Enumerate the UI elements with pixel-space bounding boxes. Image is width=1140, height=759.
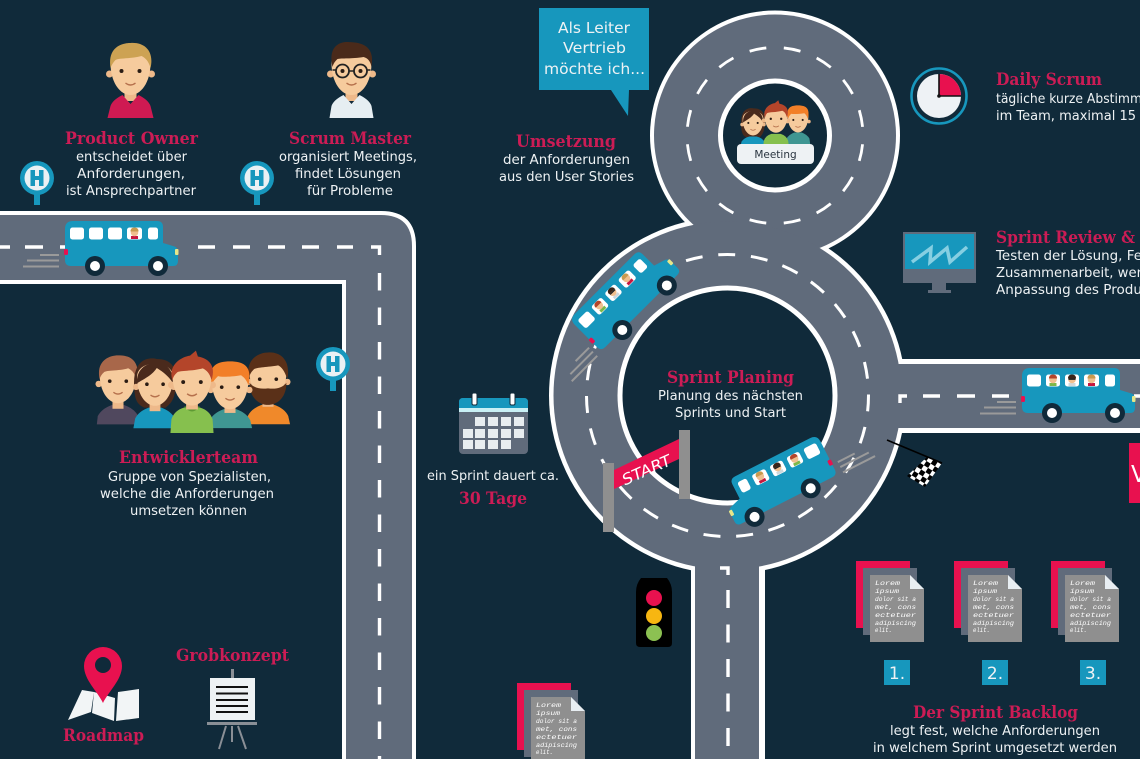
icon: document stack 2: Lorem bbox=[973, 580, 998, 587]
callout: speech bubble bbox=[539, 8, 649, 116]
icon: document stack roadmap: adipiscing bbox=[536, 742, 577, 749]
icon: bus stop 1 bbox=[20, 161, 54, 205]
heading: daily scrum: Daily Scrum bbox=[996, 70, 1103, 89]
icon: document stack 3: elit. bbox=[1070, 627, 1087, 634]
icon: document stack 1: dolor sit a bbox=[875, 596, 916, 603]
icon: document stack 1 bbox=[856, 561, 924, 642]
icon: bus stop 3 bbox=[316, 347, 350, 391]
callout: speech bubble: Vertrieb bbox=[563, 39, 626, 57]
icon: document stack roadmap: ectetuer bbox=[536, 734, 577, 741]
icon: checkered flag bbox=[887, 440, 942, 487]
number box 3: 3. bbox=[1085, 664, 1101, 684]
callout: speech bubble: Als Leiter bbox=[558, 19, 631, 37]
bus: right road bbox=[980, 368, 1136, 423]
text: entwicklerteam description: welche die Anforderungen bbox=[100, 486, 274, 502]
text: scrum master description: findet Lösungen bbox=[295, 166, 401, 182]
heading: umsetzung: Umsetzung bbox=[516, 132, 616, 151]
icon: product owner bbox=[106, 43, 155, 118]
icon: document stack 2: ectetuer bbox=[973, 612, 1014, 619]
icon: bus stop 2 bbox=[240, 161, 274, 205]
icon: document stack 2: dolor sit a bbox=[973, 596, 1014, 603]
icon: document stack 1: ectetuer bbox=[875, 612, 916, 619]
text: umsetzung description: der Anforderungen bbox=[503, 152, 630, 168]
bus: upper left of sprint ring bbox=[540, 239, 688, 388]
heading: 30 tage: 30 Tage bbox=[459, 489, 527, 508]
icon: document stack 2: adipiscing bbox=[973, 620, 1014, 627]
icon: document stack 3: met, cons bbox=[1070, 604, 1111, 611]
icon: document stack roadmap: elit. bbox=[536, 749, 553, 756]
icon: document stack 2: met, cons bbox=[973, 604, 1014, 611]
icon: presentation board bbox=[207, 669, 257, 749]
icon: roadmap bbox=[68, 647, 139, 721]
text: sprint planing description bbox=[658, 388, 803, 421]
number box 2: 2. bbox=[987, 664, 1003, 684]
number box 3 bbox=[1080, 660, 1106, 685]
text: entwicklerteam description: umsetzen können bbox=[130, 503, 247, 519]
icon: meeting group bbox=[737, 100, 814, 164]
icon: document stack 3: Lorem bbox=[1070, 580, 1095, 587]
icon: scrum master bbox=[327, 42, 376, 118]
text: sprint review description: Anpassung des Produ bbox=[996, 282, 1140, 298]
icon: document stack 1: met, cons bbox=[875, 604, 916, 611]
text: scrum master description: für Probleme bbox=[307, 183, 393, 199]
number box 2 bbox=[982, 660, 1008, 685]
callout: speech bubble: möchte ich... bbox=[544, 60, 645, 78]
text: sprint planing description: Planung des nächsten bbox=[658, 388, 803, 404]
bus: left road bbox=[23, 221, 178, 276]
heading: roadmap: Roadmap bbox=[63, 726, 144, 745]
text: umsetzung description bbox=[499, 152, 634, 185]
text: sprint review description bbox=[995, 248, 1140, 298]
text: product owner description: entscheidet über bbox=[76, 149, 187, 165]
icon: document stack 2: ipsum bbox=[973, 588, 997, 595]
text: daily scrum description: im Team, maximal 15 bbox=[996, 108, 1136, 124]
icon: document stack roadmap: ipsum bbox=[536, 710, 560, 717]
icon: document stack roadmap bbox=[517, 683, 585, 759]
icon: calendar bbox=[459, 393, 528, 454]
icon: document stack 2 bbox=[954, 561, 1022, 642]
heading: entwicklerteam: Entwicklerteam bbox=[119, 448, 259, 467]
start gate: START bbox=[621, 451, 673, 490]
icon: document stack roadmap: met, cons bbox=[536, 726, 577, 733]
text: product owner description: ist Ansprechpartner bbox=[66, 183, 196, 199]
text: entwicklerteam description bbox=[100, 469, 274, 519]
start gate bbox=[603, 430, 690, 532]
heading: product owner: Product Owner bbox=[65, 129, 198, 148]
icon: document stack 1: adipiscing bbox=[875, 620, 916, 627]
text: sprint backlog description bbox=[873, 723, 1117, 756]
icon: document stack roadmap: dolor sit a bbox=[536, 718, 577, 725]
text: umsetzung description: aus den User Stories bbox=[499, 169, 634, 185]
bus: bottom of sprint ring bbox=[716, 416, 879, 535]
number box 1: 1. bbox=[889, 664, 905, 684]
text: product owner description bbox=[66, 149, 196, 199]
heading: sprint planing: Sprint Planing bbox=[667, 368, 794, 387]
text: sprint planing description: Sprints und Start bbox=[675, 405, 786, 421]
pink box at right edge bbox=[1129, 443, 1140, 503]
text: sprint duration: ein Sprint dauert ca. bbox=[427, 468, 559, 484]
icon: monitor bbox=[903, 232, 976, 293]
icon: document stack 3: ectetuer bbox=[1070, 612, 1111, 619]
icon: document stack 1: elit. bbox=[875, 627, 892, 634]
number box 1 bbox=[884, 660, 910, 685]
text: scrum master description bbox=[279, 149, 417, 199]
icon: meeting group: Meeting bbox=[754, 149, 797, 161]
heading: scrum master: Scrum Master bbox=[289, 129, 411, 148]
icon: document stack 1: Lorem bbox=[875, 580, 900, 587]
icon: clock bbox=[912, 68, 966, 124]
text: entwicklerteam description: Gruppe von Spezialisten, bbox=[108, 469, 271, 485]
icon: document stack 1: ipsum bbox=[875, 588, 899, 595]
icon: document stack 3: ipsum bbox=[1070, 588, 1094, 595]
icon: developer team bbox=[95, 351, 291, 433]
text: sprint review description: Testen der Lösung, Fe bbox=[995, 248, 1140, 264]
text: product owner description: Anforderungen, bbox=[77, 166, 185, 182]
text: sprint backlog description: legt fest, welche Anforderungen bbox=[890, 723, 1100, 739]
icon: traffic light bbox=[636, 578, 672, 647]
text: daily scrum description bbox=[996, 91, 1140, 124]
icon: document stack 3: dolor sit a bbox=[1070, 596, 1111, 603]
icon: document stack 3 bbox=[1051, 561, 1119, 642]
icon: document stack 3: adipiscing bbox=[1070, 620, 1111, 627]
heading: grobkonzept: Grobkonzept bbox=[176, 646, 289, 665]
heading: sprint backlog: Der Sprint Backlog bbox=[913, 703, 1078, 722]
text: scrum master description: organisiert Meetings, bbox=[279, 149, 417, 165]
icon: document stack roadmap: Lorem bbox=[536, 702, 561, 709]
icon: document stack 2: elit. bbox=[973, 627, 990, 634]
text: sprint backlog description: in welchem Sprint umgesetzt werden bbox=[873, 740, 1117, 756]
